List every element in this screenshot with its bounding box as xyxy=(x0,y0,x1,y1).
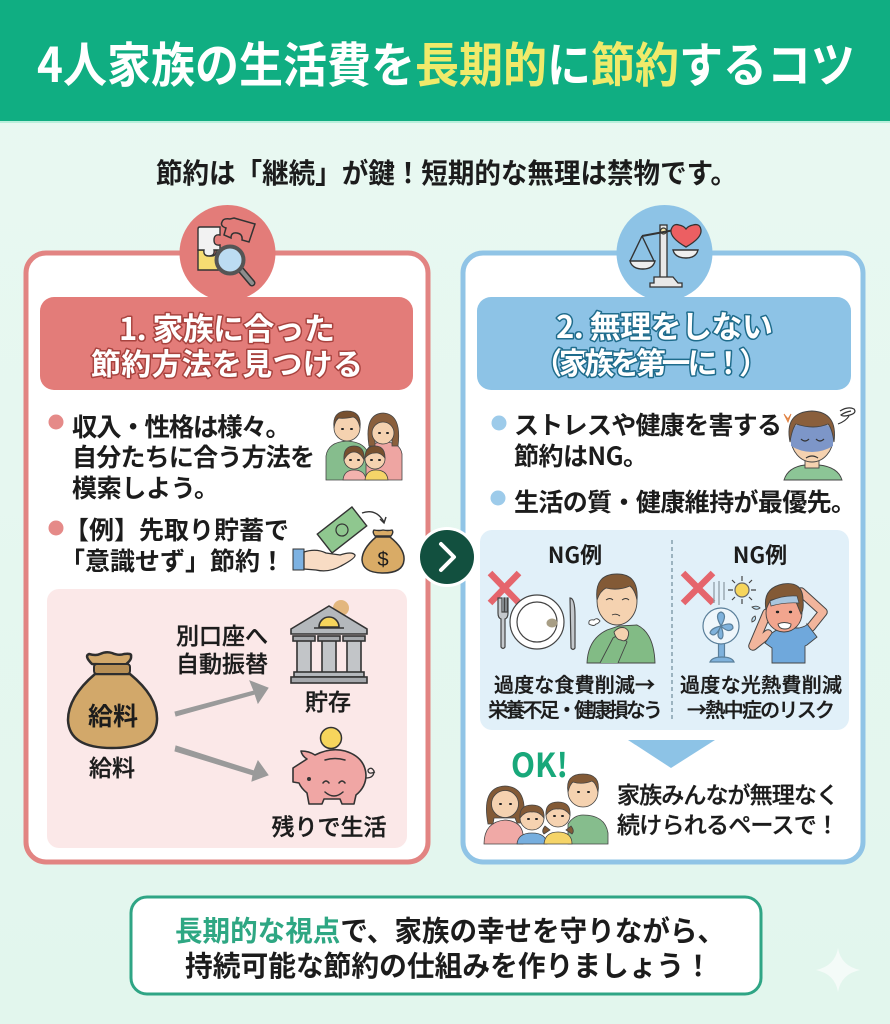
callout: conclusion: 持続可能な節約の仕組みを作りましょう！ xyxy=(185,944,712,985)
icon: bank xyxy=(291,600,367,683)
icon: X mark left xyxy=(490,573,519,603)
bullet: pay yourself first: 【例】先取り貯蓄で xyxy=(64,511,289,547)
bullet: pay yourself first: 「意識せず」節約！ xyxy=(60,542,285,578)
panel: NG examples xyxy=(480,530,849,730)
bullet: stress and health: ストレスや健康を害する xyxy=(514,406,782,442)
icon: money into bag xyxy=(293,507,404,573)
panel: find the right method xyxy=(26,205,428,862)
bullet: income and personality: 模索しよう。 xyxy=(72,469,219,505)
caption: utility cost: 過度な光熱費削減 xyxy=(680,669,842,698)
heading: 2: （家族を第一に！） xyxy=(533,339,769,383)
icon: plate and cutlery xyxy=(498,595,575,650)
icon: happy family xyxy=(484,774,608,844)
icon: fan and sun xyxy=(703,576,756,662)
arrow: to living costs xyxy=(175,746,268,781)
label: savings: 貯存 xyxy=(305,683,351,717)
icon: X mark right xyxy=(683,573,713,603)
heading: 1 xyxy=(40,297,413,390)
label: OK: OK! xyxy=(511,739,568,787)
icon: money into bag: $ xyxy=(377,549,389,571)
label: auto transfer: 別口座へ xyxy=(176,617,268,651)
icon: stressed person xyxy=(784,408,855,480)
icon: worried person xyxy=(587,574,655,663)
panel: do not overdo it xyxy=(463,205,863,862)
icon: sparkle xyxy=(816,948,860,992)
caption: food cost: 過度な食費削減→ xyxy=(494,669,655,698)
label: auto transfer: 自動振替 xyxy=(176,645,268,679)
label: auto transfer xyxy=(176,617,268,679)
arrow: to savings xyxy=(175,681,268,716)
bullet: stress and health xyxy=(492,406,782,473)
caption: food cost: 栄養不足・健康損なう xyxy=(488,694,663,723)
caption: food cost xyxy=(488,669,663,723)
icon: family of four xyxy=(326,411,402,480)
heading: 2 xyxy=(477,297,851,390)
bullet: stress and health: 節約はNG。 xyxy=(514,437,648,473)
heading: 1: 節約方法を見つける xyxy=(91,340,363,384)
title: 4人家族の生活費を長期的に節約するコツ xyxy=(37,26,855,96)
label: NG example right: NG例 xyxy=(733,538,787,570)
bullet: income and personality: 収入・性格は様々。 xyxy=(72,407,291,444)
bullet: quality of life: 生活の質・健康維持が最優先。 xyxy=(514,483,856,519)
text: sustainable pace xyxy=(617,776,839,840)
arrow: down triangle xyxy=(628,740,715,768)
text: sustainable pace: 家族みんなが無理なく xyxy=(617,776,839,810)
caption: utility cost: →熱中症のリスク xyxy=(687,694,835,723)
callout: conclusion: 長期的な視点で、家族の幸せを守りながら、 xyxy=(175,909,725,950)
label: NG example left: NG例 xyxy=(548,538,602,570)
label: salary: 給料 xyxy=(89,749,135,783)
subtitle: 節約は「継続」が鍵！短期的な無理は禁物です。 xyxy=(156,152,737,192)
bullet: pay yourself first xyxy=(48,511,289,578)
panel: savings flow xyxy=(47,589,407,848)
text: sustainable pace: 続けられるペースで！ xyxy=(617,806,839,840)
label: live on the rest: 残りで生活 xyxy=(272,808,386,842)
heading: 1: 1. 家族に合った xyxy=(119,304,335,349)
heading: 2: 2. 無理をしない xyxy=(556,302,773,347)
icon: piggy bank xyxy=(293,728,375,804)
bullet: income and personality xyxy=(48,407,315,505)
callout: conclusion xyxy=(131,897,761,994)
caption: utility cost xyxy=(680,669,842,723)
icon: puzzle and magnifier xyxy=(180,205,276,301)
icon: salary bag xyxy=(68,652,157,748)
icon: salary bag: 給料 xyxy=(88,697,138,733)
bullet: income and personality: 自分たちに合う方法を xyxy=(72,438,315,474)
icon: balance with heart xyxy=(616,205,712,301)
arrow: next button xyxy=(417,527,477,587)
header banner xyxy=(0,0,890,123)
icon: person with heat stroke xyxy=(752,584,823,663)
